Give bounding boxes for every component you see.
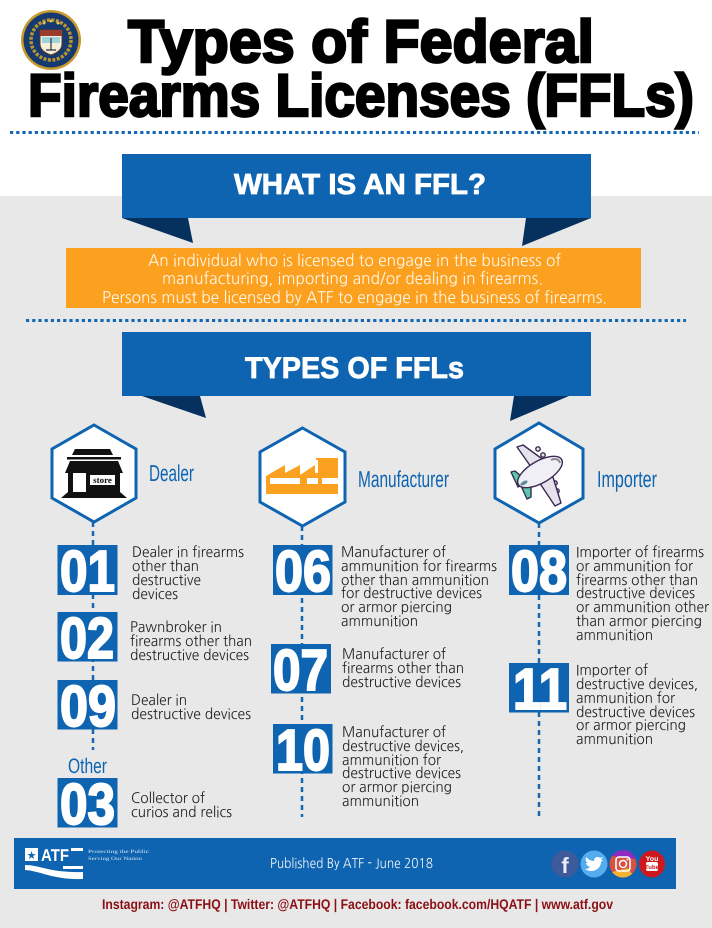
FFL type 03 — [58, 772, 232, 837]
FFL type 02: 02 — [60, 606, 114, 671]
icon: facebook: f — [561, 853, 569, 878]
FFL type 10: Manufacturer of — [342, 725, 447, 740]
FFL type 09 — [58, 674, 251, 739]
FFL type 08: 08 — [511, 539, 567, 604]
panel: FFL definition: Persons must be licensed by ATF to engage in the business of firearms. — [102, 290, 607, 306]
label: other: Other — [68, 755, 107, 778]
FFL type 08: destructive devices — [576, 586, 695, 601]
FFL type 07: Manufacturer of — [342, 647, 447, 662]
FFL type 07: firearms other than — [342, 661, 464, 676]
FFL type 10: destructive devices — [342, 766, 461, 781]
social media links: Instagram: @ATFHQ | Twitter: @ATFHQ | Facebook: facebook.com/HQATF | www.atf.gov — [102, 896, 613, 913]
FFL type 11: or armor piercing — [576, 719, 686, 733]
publication note: Published By ATF - June 2018 — [270, 856, 433, 871]
FFL type 01: destructive — [132, 573, 201, 588]
FFL type 02: Pawnbroker in — [130, 620, 222, 635]
icon: dealer store — [52, 425, 136, 522]
FFL type 06: or armor piercing — [341, 601, 452, 615]
FFL type 08: Importer of firearms — [576, 545, 704, 560]
FFL type 06 — [273, 539, 497, 629]
FFL type 10: ammunition — [342, 795, 419, 809]
ATF logo: Serving Our Nation — [88, 856, 143, 862]
icon: facebook — [552, 850, 578, 878]
FFL type 11: destructive devices — [576, 705, 695, 720]
title — [28, 8, 694, 129]
ATF logo: ATF — [41, 846, 69, 865]
FFL type 06: ammunition for firearms — [341, 559, 497, 574]
ATF logo — [25, 846, 150, 879]
FFL type 08 — [509, 539, 710, 643]
FFL type 11: destructive devices, — [576, 677, 698, 692]
FFL type 08: or ammunition for — [576, 559, 694, 574]
FFL type 11: 11 — [513, 657, 567, 722]
icon: importer airplane — [495, 423, 583, 523]
FFL type 06: Manufacturer of — [341, 545, 447, 560]
FFL type 01: other than — [132, 559, 199, 574]
FFL type 03: Collector of — [131, 791, 206, 806]
FFL type 10 — [273, 718, 464, 809]
FFL type 02: firearms other than — [130, 634, 252, 649]
FFL type 02: destructive devices — [130, 648, 249, 663]
FFL type 09: destructive devices — [131, 707, 251, 722]
FFL type 10: or armor piercing — [342, 781, 452, 795]
panel: FFL definition: An individual who is licensed to engage in the business of — [148, 253, 561, 269]
label: dealer: Dealer — [149, 460, 194, 486]
icon: youtube — [639, 850, 665, 878]
icon: youtube: You — [646, 856, 658, 863]
heading: what is an FFL: WHAT IS AN FFL? — [234, 169, 486, 201]
FFL type 07: destructive devices — [342, 675, 461, 690]
FFL type 07 — [271, 638, 464, 703]
FFL type 03: curios and relics — [131, 805, 232, 820]
ATF logo: ★ — [27, 849, 37, 862]
ATF logo: Protecting the Public — [88, 849, 150, 855]
panel: FFL definition: manufacturing, importing and/or dealing in firearms. — [162, 271, 543, 287]
label: manufacturer: Manufacturer — [358, 466, 449, 492]
FFL type 01: 01 — [60, 539, 115, 604]
FFL type 11: ammunition for — [576, 691, 676, 706]
icon: manufacturer factory — [260, 428, 345, 526]
FFL type 03: 03 — [60, 772, 115, 837]
icon: dealer store: store — [93, 475, 112, 485]
icon: youtube: Tube — [645, 864, 660, 871]
FFL type 10: ammunition for — [342, 753, 442, 768]
FFL type 09: 09 — [60, 674, 116, 739]
FFL type 06: 06 — [275, 539, 331, 604]
FFL type 08: or ammunition other — [576, 600, 710, 615]
FFL type 06: for destructive devices — [341, 586, 482, 601]
heading: types of FFLs: TYPES OF FFLs — [245, 352, 464, 385]
FFL type 06: ammunition — [341, 615, 418, 629]
FFL type 10: destructive devices, — [342, 739, 464, 754]
FFL type 06: other than ammunition — [341, 573, 489, 588]
FFL type 11: ammunition — [576, 733, 653, 747]
icon: ATF seal — [21, 10, 81, 70]
FFL type 01: Dealer in firearms — [132, 545, 244, 560]
FFL type 07: 07 — [273, 638, 328, 703]
icon: twitter — [580, 850, 608, 878]
label: importer: Importer — [597, 466, 657, 492]
banner: types of FFLs — [122, 332, 591, 421]
FFL type 09: Dealer in — [131, 693, 187, 708]
FFL type 08: than armor piercing — [576, 614, 702, 629]
FFL type 02 — [58, 606, 252, 671]
FFL type 11 — [509, 657, 698, 747]
FFL type 11: Importer of — [576, 663, 649, 678]
FFL type 08: ammunition — [576, 629, 653, 643]
FFL type 01 — [58, 539, 244, 604]
FFL type 10: 10 — [276, 718, 330, 783]
title: Types of Federal — [128, 8, 594, 75]
FFL type 01: devices — [132, 587, 178, 602]
panel: FFL definition — [66, 248, 641, 308]
banner: what is an FFL — [122, 154, 591, 246]
icon: instagram — [610, 850, 636, 878]
FFL type 08: firearms other than — [576, 573, 698, 588]
footer bar — [14, 838, 676, 889]
